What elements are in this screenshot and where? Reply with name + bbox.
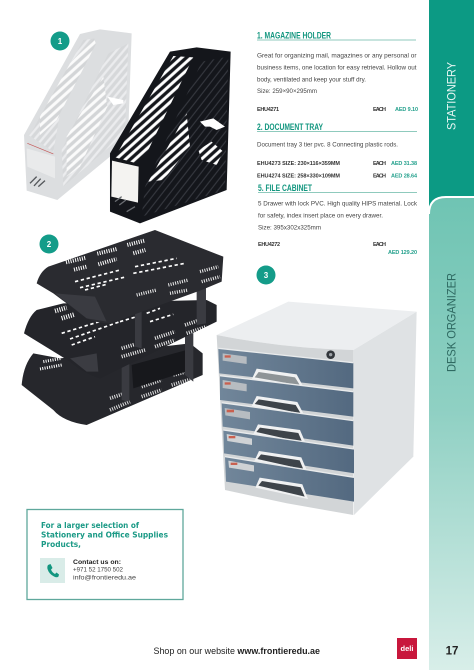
- footer website line: Shop on our website www.frontieredu.ae: [154, 646, 320, 657]
- description: magazine holder: [257, 52, 417, 95]
- price row: EHU4271: EHU4271: [257, 107, 279, 113]
- sidebar tab: stationery: [429, 0, 474, 215]
- description: magazine holder: Size: 259×90×295mm: [257, 88, 317, 95]
- section: file cabinet: [258, 183, 418, 256]
- contact card heading: [41, 521, 168, 549]
- contact card heading: Stationery and Office Supplies: [41, 530, 168, 540]
- product image: three tier document tray: [22, 230, 223, 425]
- drawer 1: [218, 348, 353, 388]
- section: document tray: [257, 122, 418, 180]
- description: file cabinet: Size: 395x302x325mm: [258, 224, 321, 232]
- contact card: [27, 510, 183, 600]
- description: file cabinet: [258, 200, 418, 232]
- drawer 2: [220, 376, 353, 417]
- bottom tray: [22, 331, 203, 425]
- price row: EHU4273: EACH: [373, 161, 386, 167]
- contact card heading: Products,: [41, 540, 81, 549]
- description: magazine holder: Great for organizing mail, magazines or any personal or: [257, 52, 417, 60]
- number badge 2: 2: [47, 240, 52, 249]
- logo: deli: deli: [401, 644, 413, 653]
- price row: EHU4273: EHU4273 SIZE: 230×116×359MM: [257, 161, 340, 167]
- sidebar tab: desk organizer: [429, 197, 474, 670]
- sidebar label: desk organizer: DESK ORGANIZER: [446, 273, 458, 372]
- heading: file cabinet: 5. FILE CABINET: [258, 183, 312, 193]
- number badge 2: [40, 234, 58, 254]
- description: magazine holder: body, ventilated and keep your stuff dry.: [257, 76, 366, 84]
- product image: black magazine holder: [110, 47, 231, 223]
- price row: EHU4272: EACH: [373, 242, 386, 248]
- price row: EHU4274: EACH: [373, 174, 386, 180]
- contact card heading: For a larger selection of: [41, 521, 139, 530]
- contact details: info@frontieredu.ae: [73, 574, 136, 582]
- drawer 5: [225, 457, 354, 502]
- price row: EHU4272: EHU4272: [258, 242, 280, 248]
- product image: five drawer file cabinet: [217, 302, 417, 515]
- top tray: [37, 230, 223, 323]
- middle tray: [24, 279, 217, 378]
- page number: 17: [446, 646, 458, 658]
- number badge 3: [256, 266, 276, 284]
- contact details: Contact us on:: [73, 559, 121, 566]
- contact details: [73, 559, 136, 582]
- description: file cabinet: 5 Drawer with lock PVC. High quality HIPS material. Lock: [258, 200, 418, 208]
- sidebar label: stationery: STATIONERY: [446, 62, 458, 130]
- heading: document tray: 2. DOCUMENT TRAY: [257, 122, 323, 132]
- logo: deli: [397, 638, 417, 659]
- icon: phone: [40, 558, 65, 583]
- description: magazine holder: business items, one location for easy retrieval. Hollow out: [257, 64, 417, 72]
- price row: EHU4271: AED 9.10: [395, 107, 418, 113]
- price row: EHU4273: [257, 161, 417, 167]
- price row: EHU4273: AED 31.38: [391, 161, 417, 167]
- price row: EHU4271: EACH: [373, 107, 386, 113]
- price row: EHU4274: [257, 174, 418, 180]
- description: document tray: Document tray 3 tier pvc. 8 Connecting plastic rods.: [257, 142, 398, 148]
- description: file cabinet: for safety, index insert place on every drawer.: [258, 212, 383, 220]
- section: magazine holder: [257, 30, 418, 113]
- drawer 4: [223, 430, 354, 473]
- product image: white magazine holder: [24, 29, 132, 200]
- number badge 3: 3: [264, 271, 269, 280]
- price row: EHU4274: EHU4274 SIZE: 258×330×109MM: [257, 174, 340, 180]
- contact details: +971 52 1750 502: [73, 566, 123, 574]
- drawer 3: [222, 403, 353, 446]
- price row: EHU4271: [257, 107, 418, 113]
- heading: magazine holder: 1. MAGAZINE HOLDER: [257, 30, 331, 40]
- price row: EHU4274: AED 28.64: [391, 174, 418, 180]
- number badge 1: [50, 32, 70, 50]
- price row: EHU4272: AED 129.20: [388, 250, 417, 256]
- price row: EHU4272: [258, 242, 417, 256]
- number badge 1: 1: [58, 37, 63, 46]
